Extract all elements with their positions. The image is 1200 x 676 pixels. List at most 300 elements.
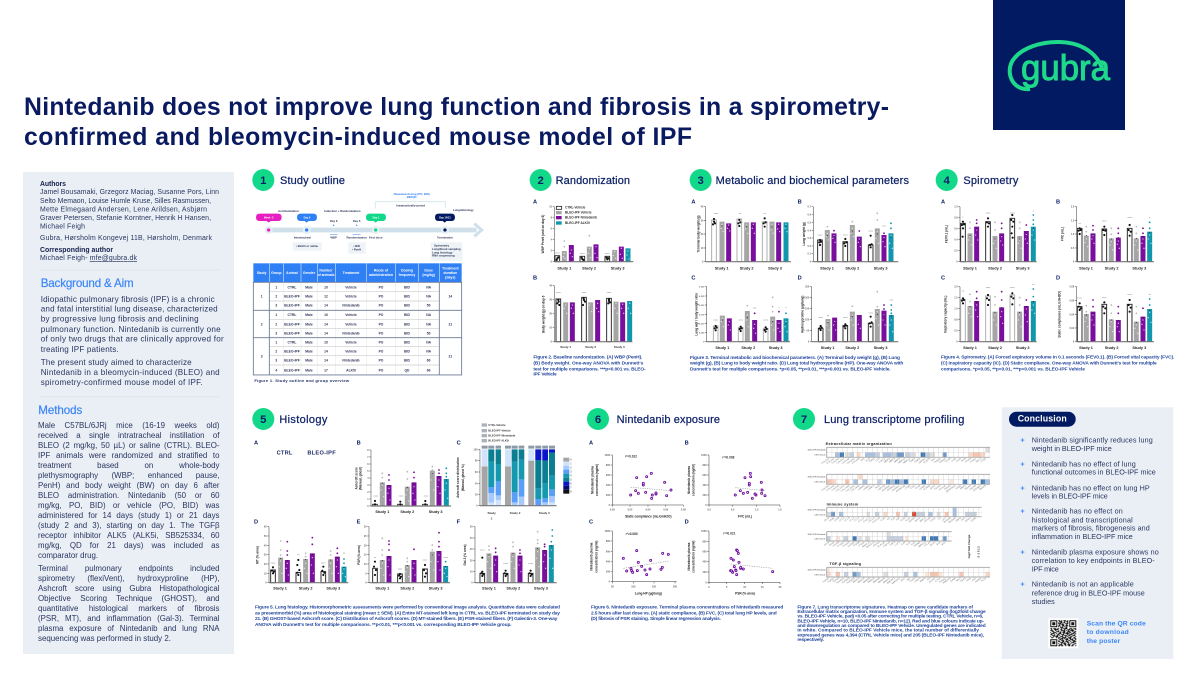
- heatmap: extracellular matrix organization 2: FBLN5: [970, 485, 977, 491]
- legend: score colours: 6: [570, 484, 572, 486]
- table: group overview: Nintedanib: [342, 304, 360, 308]
- table: group overview: NA: [426, 341, 432, 345]
- chart 6D: PSR: Nintedanib plasma: [687, 542, 691, 571]
- table: group overview: Male: [305, 304, 313, 308]
- heatmap: immune system 1: IRF7: [961, 517, 967, 522]
- table: group overview: 60: [427, 359, 431, 363]
- chart 4B: FVC: [1056, 200, 1154, 271]
- caption: figure 4: (C) Inspiratory capacity (IC). (D) Static compliance. One-way ANOVA with Dunnett's test for multiple: [941, 361, 1157, 367]
- chart 2B: body weight: Body weight (g) on day 6: [541, 295, 545, 333]
- table: group overview: BID: [404, 304, 410, 308]
- conclusion bullets: +: [1020, 550, 1025, 557]
- conclusion bullets: +: [1020, 462, 1025, 468]
- chart 5C: ashcroft distribution: (Manual, ghost %): [461, 464, 465, 491]
- heatmap: immune system 1: CD68: [834, 517, 841, 522]
- chart 3C: lung to body weight ratio: 0.025: [699, 296, 705, 298]
- chart 5C: ashcroft distribution: Ashcroft score distribution: [456, 457, 460, 498]
- heatmap: immune system 1: TNF: [896, 517, 901, 522]
- heatmap: extracellular matrix organization 1: COL6A3: [851, 457, 861, 465]
- table: group overview: 1: [275, 313, 277, 317]
- heatmap: TGF-beta signaling: ENG: [967, 578, 972, 582]
- heatmap: extracellular matrix organization 1: MMP14: [903, 458, 912, 465]
- chart 3D: hydroxyproline: ***: [890, 299, 894, 303]
- table: group overview: Treatment: [343, 271, 360, 275]
- chart 2A: WBP: Study 1: [557, 267, 572, 271]
- chart 3B: lung weight: 0.6: [808, 214, 812, 217]
- chart 3B: lung weight: ****: [868, 230, 874, 234]
- caption: figure 5: [255, 605, 560, 628]
- chart 4B: FVC: B: [1056, 200, 1060, 206]
- chart 5F: galectin-3: Gal-3 (% area): [463, 544, 467, 566]
- caption: figure 2: test for multiple comparisons. ***p<0.001 vs. BLEO-: [533, 366, 646, 372]
- caption: figure 3: [689, 355, 903, 372]
- heatmap: extracellular matrix organization 1: THBS1: [934, 458, 942, 464]
- heatmap: immune system 2: SIGLEC1: [866, 541, 876, 549]
- chart 6C: lung HP: [589, 519, 678, 596]
- caption: figure 5: as presentmorbid (%) area of histological staining (mean ± SEM). (A) Entire MT-stained left lung in CTRL vs. BLEO-IPF terminated on study day: [255, 610, 560, 616]
- chart 3A: terminal body weight: ****: [714, 212, 719, 216]
- heatmap: TGF-beta signaling: TGF-β signaling: [829, 562, 862, 566]
- chart 3D: hydroxyproline: 250: [805, 286, 810, 289]
- chart 6B: FVC: [685, 441, 782, 519]
- chart 3C: lung to body weight ratio: 0.020: [699, 305, 705, 307]
- chart 3D: hydroxyproline: 200: [805, 297, 810, 300]
- text: background: of only two drugs that are clinically approved for: [41, 335, 224, 344]
- timeline: Termination: [437, 236, 453, 240]
- chart 4D: static compliance: 0: [1073, 341, 1075, 344]
- chart 2A: WBP: WBP PenH (unit on day 6): [541, 215, 545, 253]
- heatmap: extracellular matrix organization 2: HSPG2: [878, 485, 886, 491]
- chart 5C: ashcroft distribution: 100: [473, 448, 478, 451]
- chart 4C: inspiratory capacity: Study 3: [1016, 346, 1030, 350]
- table: group overview: BLEO-IPF: [284, 304, 300, 308]
- chart 6A: static compliance: 0.04: [646, 509, 651, 512]
- badge 2: 2: [538, 175, 544, 187]
- chart 5E: PSR: **: [374, 556, 377, 560]
- table: group overview: duration: [443, 271, 457, 275]
- chart 4B: FVC: *: [1149, 216, 1151, 220]
- table: group overview: PO: [379, 359, 384, 363]
- chart 2A: WBP: A: [533, 200, 537, 206]
- table: group overview: 2: [275, 295, 277, 299]
- chart 5D: MT: 60: [264, 526, 267, 529]
- legend: BLEO-IPF ALK5i: [565, 221, 590, 225]
- chart 5D: MT: 40: [264, 544, 267, 547]
- text: methods: (study 2 and 3), starting on day 1. The TGFβ: [38, 521, 220, 530]
- timeline: Lung/Histology: [453, 208, 474, 212]
- chart 5E: PSR: ****: [423, 559, 428, 563]
- table: group overview: 14: [324, 304, 328, 308]
- chart 3C: lung to body weight ratio: [691, 276, 790, 350]
- chart 3D: hydroxyproline: D: [798, 276, 802, 282]
- heatmap: immune system 1: S100A8: [943, 516, 952, 524]
- chart 5D: MT: **: [297, 553, 300, 557]
- heatmap: immune system 1: CCL17: [858, 517, 866, 523]
- heatmap: TGF-beta signaling: TGFBR2: [842, 577, 851, 585]
- chart 6B: FVC: 1.5: [778, 509, 782, 512]
- caption: figure 2: Figure 2. Baseline randomization. (A) WBP (PenH).: [533, 355, 643, 361]
- chart 4B: FVC: FVC (mL): [1060, 227, 1064, 241]
- chart 4C: inspiratory capacity: C: [941, 276, 945, 282]
- table: group overview: PO: [379, 323, 384, 327]
- legend: treatment boxes: BLEO-IPF ALK5i: [488, 439, 509, 443]
- heatmap: immune system 2: CSF1R: [883, 542, 891, 548]
- chart 4A: FEV0.1: 1.0: [954, 206, 958, 209]
- conclusion bullets: weight in BLEO-IPF mice: [1031, 444, 1112, 453]
- table: group overview: 1: [275, 286, 277, 290]
- chart 3A: terminal body weight: Study 1: [715, 267, 729, 271]
- chart 2B: body weight: Study 1: [560, 345, 571, 349]
- heatmap: immune system 2: NCF1: [930, 542, 937, 547]
- heading: background and aim: Background & Aim: [41, 277, 134, 290]
- table: group overview: Male: [305, 323, 313, 327]
- conclusion bullets: Nintedanib is not an applicable: [1032, 579, 1134, 588]
- chart 5B: ashcroft score: Study 3: [429, 510, 443, 514]
- image placeholder A: CTRL and BLEO-IPF: CTRL: [277, 451, 293, 457]
- legend: BLEO-IPF Nintedanib: [565, 216, 597, 220]
- caption: figure 4: [941, 355, 1175, 372]
- heatmap: immune system 1: GBP2: [956, 517, 962, 523]
- chart 6B: FVC: 600: [702, 474, 707, 477]
- chart 5C: ashcroft distribution: 20: [475, 493, 478, 496]
- heatmap: immune system 2: BTK: [942, 542, 947, 546]
- chart 3B: lung weight: ****: [843, 234, 848, 238]
- conclusion bullets: correlation to key endpoints in BLEO-: [1032, 556, 1155, 565]
- chart 3A: terminal body weight: Study 2: [740, 267, 754, 271]
- chart 4C: inspiratory capacity: **: [1032, 283, 1035, 287]
- panel 2: randomization: [530, 169, 646, 378]
- heatmap: immune system 1: CD163: [924, 517, 932, 523]
- chart 6D: PSR: r²=0.021: [723, 531, 736, 535]
- chart 5B: ashcroft score: ****: [424, 495, 429, 499]
- text: methods: BLEO administration. Nintedanib (50 or 60: [38, 491, 220, 500]
- legend: CTRL-Vehicle: [565, 206, 586, 210]
- panel 7: lung transcriptome profiling: [793, 383, 990, 657]
- heatmap: extracellular matrix organization 1: CTRL Vehicle: [814, 455, 825, 457]
- chart 4B: FVC: 2.0: [1071, 206, 1075, 209]
- chart 4A: FEV0.1: FEV0.1 (mL): [944, 225, 948, 243]
- badge 5: 5: [260, 414, 266, 426]
- chart 6C: lung HP: r²=0.080: [626, 532, 638, 536]
- table: group overview: 60: [427, 368, 431, 372]
- legend: treatment boxes: BLEO-IPF-Nintedanib: [488, 434, 516, 438]
- chart 5D: MT: **: [343, 551, 346, 555]
- panel 4: spirometry: [936, 169, 1175, 372]
- heatmap: TGF-beta signaling: CTRL Vehicle: [814, 574, 825, 576]
- chart 3A: terminal body weight: A: [691, 200, 695, 206]
- chart 5F: galectin-3: 0: [471, 582, 473, 585]
- heatmap: extracellular matrix organization 2: VCAM1: [923, 484, 932, 491]
- chart 6B: FVC: Nintedanib plasma: [687, 466, 691, 494]
- authors block: [40, 181, 219, 262]
- text: methods: sequencing was performed in study 2.: [38, 634, 171, 643]
- chart 4C: inspiratory capacity: ****: [986, 286, 991, 290]
- conclusion bullets: [1020, 435, 1159, 606]
- QR call to action: Scan the QR code: [1087, 621, 1146, 628]
- heatmap: extracellular matrix organization 1: FN1: [861, 458, 866, 462]
- badge 7: [793, 408, 815, 430]
- heatmap: extracellular matrix organization 2: CTSB: [905, 485, 911, 491]
- chart 2A: WBP: 0: [551, 261, 553, 264]
- table: group overview: Male: [305, 332, 313, 336]
- text: background: spirometry-confirmed mouse model of IPF.: [41, 378, 203, 387]
- chart 6C: lung HP: 400: [606, 560, 611, 563]
- heatmap: immune system 2: IL4R: [911, 542, 916, 546]
- heatmap: immune system 1: CCL7: [854, 517, 861, 522]
- chart 6D: PSR: 5: [726, 586, 728, 589]
- chart 5B: ashcroft score: 4: [367, 477, 369, 480]
- heatmap: immune system 2: CTRL Vehicle: [814, 539, 825, 541]
- heatmap: extracellular matrix organization 1: Extracellular matrix organization: [826, 442, 892, 446]
- table: group overview: Vehicle: [345, 286, 357, 290]
- heatmap: immune system 2: MPEG1: [919, 541, 927, 548]
- heatmap: extracellular matrix organization 2: ADAMTS2: [895, 484, 907, 493]
- chart 5E: PSR: ****: [443, 556, 449, 560]
- text: background: Idiopathic pulmonary fibrosis (IPF) is a chronic: [41, 295, 215, 304]
- chart 6B: FVC: 0.0: [707, 509, 711, 512]
- title: confirmed and bleomycin-induced mouse model of IPF: [24, 124, 692, 151]
- heatmap: immune system 2: CTLA4: [923, 541, 932, 548]
- chart 4B: FVC: 1.0: [1071, 233, 1075, 236]
- caption: figure 3: weight (g), (B) Lung to body weight ratio. (D) Lung total hydroxyproline (HP). One-way ANOVA with: [689, 361, 903, 367]
- heatmap: TGF-beta signaling: TGFBR1: [836, 577, 846, 585]
- table: group overview: CTRL: [288, 313, 296, 317]
- chart 5B: ashcroft score: Study 1: [375, 510, 390, 514]
- chart 5F: galectin-3: 40: [470, 537, 473, 540]
- chart 3C: lung to body weight ratio: 0: [703, 342, 705, 344]
- conclusion bullets: functional outcomes in BLEO-IPF mice: [1032, 467, 1156, 476]
- chart 4A: FEV0.1: *: [962, 215, 964, 219]
- chart 4A: FEV0.1: A: [941, 200, 945, 206]
- chart 4B: FVC: 1.5: [1071, 219, 1075, 222]
- chart 5C: ashcroft distribution: 40: [475, 482, 478, 485]
- chart 3A: terminal body weight: Terminal body weight (g): [697, 215, 701, 253]
- chart 3B: lung weight: 0.4: [808, 229, 812, 232]
- text: methods: [38, 421, 220, 646]
- chart 4D: static compliance: [1056, 276, 1154, 350]
- heatmap: extracellular matrix organization 1: ITGB1: [970, 458, 977, 464]
- table: group overview: NA: [426, 350, 432, 354]
- timeline: Lung/blood sampling: [432, 247, 461, 251]
- chart 2A: WBP: ****: [555, 251, 560, 255]
- timeline: Induction + Randomization: [324, 209, 361, 213]
- timeline: • BW: [353, 244, 360, 248]
- chart 4C: inspiratory capacity: **: [962, 290, 965, 294]
- badge 5: [252, 408, 274, 430]
- text: methods: PenH) and body weight (BW) on day 6 after: [38, 481, 220, 490]
- chart 3C: lung to body weight ratio: Study 1: [715, 346, 730, 350]
- heatmap: immune system 2: PTPRC: [873, 542, 881, 548]
- chart 6B: FVC: 0.5: [731, 509, 735, 512]
- QR code: [1048, 618, 1078, 648]
- text: background: by progressive lung fibrosis and declining: [41, 315, 199, 324]
- caption: figure 6: Figure 6. Nintedanib exposure. Terminal plasma concentrations of Nintedanib measured: [591, 605, 783, 611]
- table: group overview: Male: [305, 341, 313, 345]
- legend: treatment boxes: BLEO-IPF-Vehicle: [488, 429, 511, 433]
- text: methods: Ashcroft score using Gubra Histopathological: [38, 584, 220, 593]
- text: background: pulmonary function. Nintedanib is currently one: [41, 325, 221, 334]
- heatmap: immune system 2: ITGAM: [853, 541, 860, 548]
- chart 6C: lung HP: concentration (ng/ml): [594, 541, 598, 573]
- conclusion bullets: +: [1020, 438, 1025, 444]
- chart 3C: lung to body weight ratio: C: [691, 276, 695, 282]
- heatmap: immune system 1: IL6: [887, 517, 891, 521]
- heatmap: extracellular matrix organization 1: MMP2: [884, 458, 891, 464]
- chart 3C: lung to body weight ratio: Study 2: [741, 346, 755, 350]
- timeline: Day 0: [304, 216, 311, 219]
- conclusion pill: Conclusion: [1018, 413, 1067, 423]
- heatmap: extracellular matrix organization 1: LOXL2: [879, 458, 886, 464]
- table: group overview: 3: [261, 355, 263, 359]
- chart 4D: static compliance: 0.04: [1069, 313, 1075, 316]
- chart 6A: static compliance: [589, 441, 686, 519]
- heatmap: immune system 1: C3: [938, 517, 942, 521]
- chart 5D: MT: Study 2: [299, 586, 313, 590]
- chart 6D: PSR: 600: [702, 551, 707, 554]
- table: group overview: Nintedanib: [342, 359, 360, 363]
- table: group overview: CTRL: [288, 341, 296, 345]
- heatmap: immune system 1: TLR4: [905, 517, 912, 523]
- table: group overview: Male: [305, 313, 313, 317]
- heatmap: extracellular matrix organization 1: [808, 383, 990, 539]
- chart 3A: terminal body weight: 30: [701, 219, 704, 222]
- table: group overview: ALK5i: [346, 368, 356, 372]
- heatmap: immune system 1: CD86: [829, 517, 835, 523]
- table: group overview: 3: [275, 304, 277, 308]
- chart 3D: hydroxyproline: Study 2: [845, 346, 859, 350]
- heatmap: TGF-beta signaling: NOG: [981, 578, 987, 582]
- chart 2B: body weight: Study 2: [585, 345, 596, 349]
- table: group overview: BID: [404, 341, 410, 345]
- table: group overview: NA: [426, 295, 432, 299]
- chart 4C: inspiratory capacity: Study 1: [963, 346, 978, 350]
- chart 3C: lung to body weight ratio: *: [785, 306, 787, 310]
- chart 6A: static compliance: 0.08: [681, 509, 686, 512]
- chart 3A: terminal body weight: 0: [702, 261, 704, 264]
- table: group overview: PO: [379, 368, 384, 372]
- chart 3D: hydroxyproline: 100: [805, 319, 810, 322]
- table: group overview: Male: [305, 359, 313, 363]
- table: group overview: Vehicle: [345, 341, 357, 345]
- chart 3A: terminal body weight: 20: [701, 233, 704, 236]
- QR call to action: [1087, 621, 1146, 645]
- heatmap: extracellular matrix organization 2: PLOD2: [939, 485, 947, 491]
- heatmap: immune system 1: CD3E: [971, 517, 977, 523]
- chart 5C: ashcroft distribution: 0: [476, 505, 478, 508]
- badge 6: [587, 408, 609, 430]
- chart 3B: lung weight: Study 1: [820, 267, 835, 271]
- chart 6B: FVC: FVC (mL): [738, 515, 752, 519]
- heatmap: immune system 1: MRC1: [920, 517, 927, 523]
- conclusion bullets: IPF mice: [1032, 564, 1059, 573]
- chart 3D: hydroxyproline: Study 3: [874, 346, 888, 350]
- table: group overview: BLEO-IPF: [284, 323, 300, 327]
- chart 5D: MT: Study 1: [273, 586, 288, 590]
- authors block: Michael Feigh- mfe@gubra.dk: [40, 255, 138, 262]
- chart 6C: lung HP: 200: [673, 585, 678, 588]
- heatmap: extracellular matrix organization 2: BMP1: [960, 485, 967, 490]
- chart 2B: body weight: Study 3: [614, 345, 625, 349]
- chart 6D: PSR: 200: [702, 571, 707, 574]
- table: group overview: 14: [324, 323, 328, 327]
- heatmap: immune system 1: CD74: [824, 517, 830, 523]
- timeline: • PenH: [352, 248, 361, 252]
- chart 5D: MT: MT (% area): [255, 546, 259, 564]
- heatmap: TGF-beta signaling: LTBP1: [914, 577, 922, 583]
- timeline: Week -3: [264, 216, 274, 219]
- heatmap: extracellular matrix organization 2: NID1: [875, 485, 881, 490]
- chart 6A: static compliance: Static compliance (mL/cmH2O): [625, 515, 672, 519]
- chart 5F: galectin-3: 30: [470, 548, 473, 551]
- table: group overview: Vehicle: [345, 295, 357, 299]
- chart 5F: galectin-3: [457, 520, 557, 590]
- chart 5B: ashcroft score: 5: [367, 470, 369, 473]
- table: group overview: BLEO-IPF: [284, 295, 300, 299]
- chart 2A: WBP: 8: [551, 217, 553, 220]
- heatmap: immune system 2: IL13: [906, 542, 912, 546]
- chart 4D: static compliance: D: [1056, 276, 1060, 282]
- chart 3D: hydroxyproline: Hydroxyproline (µg/lung): [800, 296, 804, 333]
- heatmap: extracellular matrix organization 2: MFAP5: [979, 484, 987, 491]
- heatmap: immune system 1: BLEO-IPF Nintedanib: [808, 509, 825, 512]
- chart 5E: PSR: 5: [365, 572, 367, 575]
- QR call to action: to download: [1087, 629, 1129, 636]
- heatmap: immune system 2: FCGR1: [837, 541, 846, 548]
- table: group overview: Vehicle: [345, 350, 357, 354]
- chart 2B: body weight: 0: [551, 341, 553, 344]
- heatmap: extracellular matrix organization 2: ADAM17: [891, 484, 901, 492]
- timeline: Acclimatization: [278, 209, 299, 213]
- chart 5E: PSR: Study 2: [400, 586, 414, 590]
- title: [24, 94, 889, 151]
- chart 5F: galectin-3: 20: [470, 559, 473, 562]
- heatmap: extracellular matrix organization 2: COL16A1: [850, 484, 861, 493]
- table: group overview: [253, 263, 462, 375]
- caption: figure 6: 2.5 hours after last dose vs. (A) static compliance, (B) FVC, (C) total lung HP levels, and: [591, 610, 777, 616]
- conclusion bullets: Nintedanib has no effect of lung: [1032, 459, 1136, 468]
- chart 4D: static compliance: 0.06: [1069, 299, 1075, 302]
- timeline: • BLEO or saline: [296, 244, 318, 248]
- chart 4C: inspiratory capacity: 0: [956, 341, 958, 344]
- table: group overview: BLEO-IPF: [284, 359, 300, 363]
- table: group overview: Study: [257, 271, 267, 275]
- chart 3C: lung to body weight ratio: ***: [753, 306, 757, 310]
- timeline: Lung histology: [432, 250, 453, 254]
- chart 5D: MT: ****: [321, 561, 326, 565]
- QR call to action: the poster: [1087, 638, 1121, 645]
- chart 3D: hydroxyproline: 0: [808, 341, 810, 344]
- table: group overview: NA: [426, 286, 432, 290]
- chart 4A: FEV0.1: 0.8: [954, 217, 958, 220]
- image placeholder A: CTRL and BLEO-IPF: [254, 441, 336, 457]
- chart 5D: MT: 10: [264, 572, 267, 575]
- chart 4C: inspiratory capacity: 2.0: [954, 286, 958, 289]
- chart 5E: PSR: Study 3: [429, 586, 443, 590]
- heatmap: extracellular matrix organization 1: FBN1: [869, 458, 876, 463]
- heatmap: extracellular matrix organization 2: CD44: [915, 485, 922, 490]
- caption: figure 3: Figure 3. Terminal metabolic and biochemical parameters. (A) Terminal body weight (g), (B) Lung: [690, 355, 900, 361]
- heatmap: TGF-beta signaling: ID1: [927, 577, 932, 581]
- table: group overview: 10: [324, 286, 328, 290]
- text: methods: quantitative histological markers of fibrosis: [38, 604, 220, 613]
- chart 6A: static compliance: concentration (ng/ml): [595, 464, 599, 496]
- text: background: The present study aimed to characterize: [41, 358, 192, 367]
- heatmap: extracellular matrix organization 2: TGFB1: [934, 485, 942, 491]
- text: methods: Male C57BL/6JRj mice (16-19 weeks old): [38, 421, 220, 430]
- authors block: Mette Elmegaard Andersen, Lene Arildsen, Asbjørn: [40, 207, 207, 214]
- chart 3C: lung to body weight ratio: Lung wgt / body weight ratio: [695, 293, 699, 336]
- chart 6B: FVC: r²=0.008: [722, 456, 735, 460]
